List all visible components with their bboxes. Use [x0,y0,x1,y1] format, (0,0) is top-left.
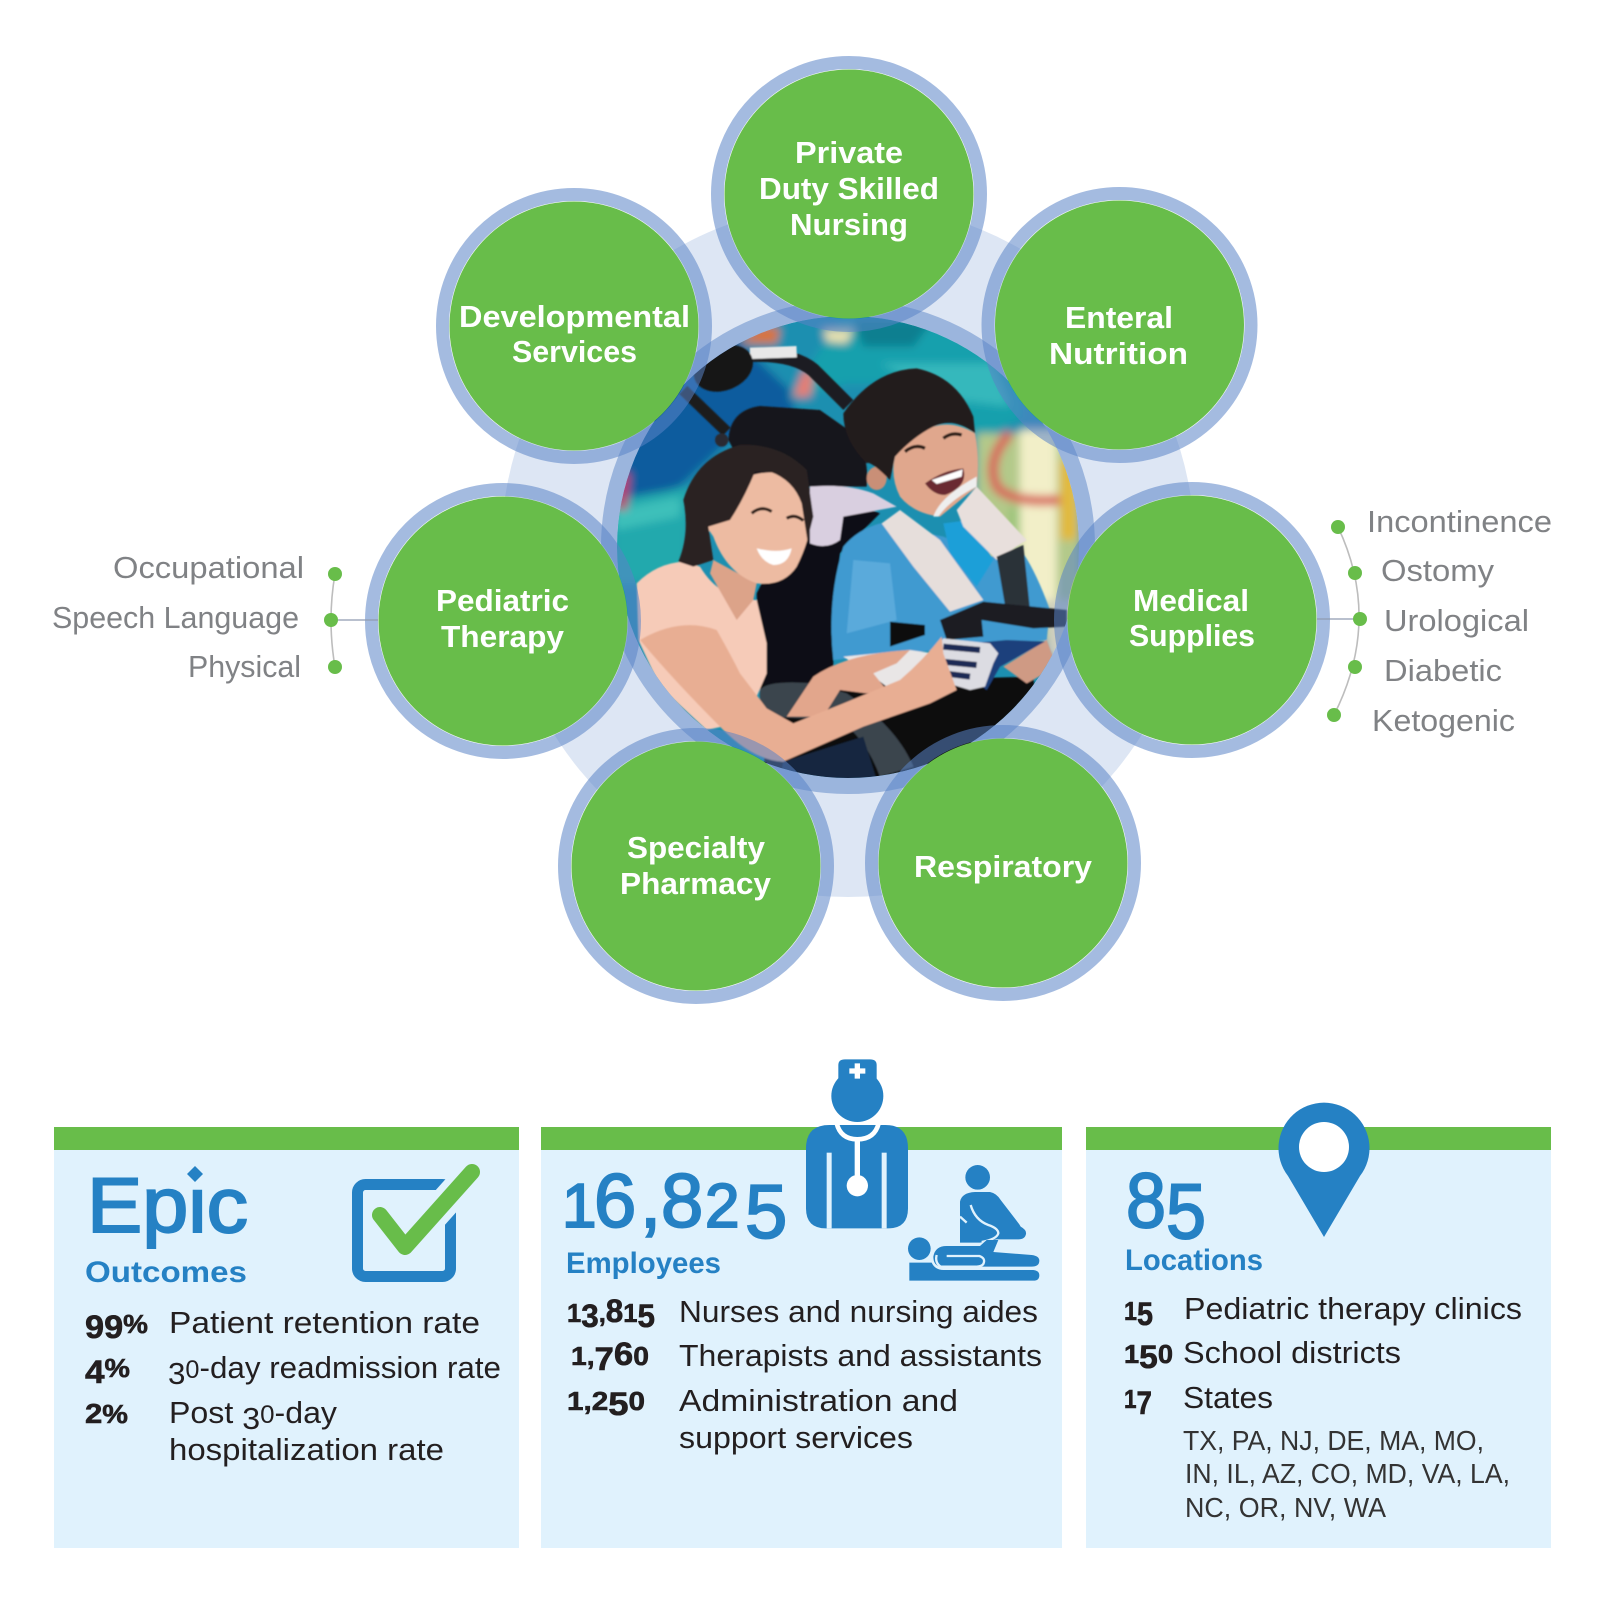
service: Enteral Nutrition: Nutrition [1049,336,1188,371]
stats: outcomes: 4 [85,1354,105,1390]
service: Private Duty Skilled Nursing: Nursing [790,207,908,242]
heading: 16,825: 2 [705,1172,739,1241]
list: pediatric therapy types [52,550,378,684]
stats: locations: Pediatric therapy clinics [1184,1291,1522,1326]
stats: employees: 1 [567,1298,581,1328]
heading: 85: 5 [1166,1167,1206,1255]
icon: check box [358,1172,472,1276]
service: Pediatric Therapy [372,490,634,752]
stats: locations: 5 [1139,1339,1158,1375]
background light disc [501,203,1195,897]
service: Medical Supplies [1060,488,1324,752]
stats: locations: 0 [1158,1339,1173,1369]
service: Respiratory: Respiratory [914,849,1093,884]
service: Medical Supplies: Supplies [1129,618,1255,653]
heading: 16,825: 1 [562,1172,596,1241]
panel: Employees [541,1059,1062,1548]
photo ring [609,308,1087,786]
stats: locations: 7 [1137,1385,1152,1421]
service: Private Duty Skilled Nursing: Duty Skilled [759,171,939,206]
service: Pediatric Therapy: Pediatric [436,583,569,618]
photo: girl beside smiling boy in wheelchair [617,316,1079,778]
stats: outcomes: -day [275,1395,335,1430]
list: state abbreviations [1183,1425,1510,1523]
service: Enteral Nutrition: Enteral [1065,300,1173,335]
service: Private Duty Skilled Nursing: Private [795,135,903,170]
stats: employees: Administration and [679,1383,958,1418]
stats: employees: 7 [595,1341,614,1377]
stats: employees: 0 [629,1386,645,1416]
service: Specialty Pharmacy: Pharmacy [620,866,772,901]
stats: locations: 1 [1124,1384,1137,1414]
list: state abbreviations: IN, IL, AZ, CO, MD, VA, LA, [1185,1458,1510,1489]
stats: employees: Nurses and nursing aides [679,1294,1038,1329]
heading: Epic: Epic [87,1161,248,1249]
list: medical supply types: Ketogenic [1372,703,1515,738]
stats: employees: 5 [608,1386,629,1422]
stats: employees: 3 [581,1298,599,1334]
icon: therapist with patient [908,1165,1039,1281]
list: medical supply types [1317,504,1552,738]
heading: 16,825: 8 [661,1159,703,1244]
stats: locations: States [1183,1380,1273,1415]
subheading: Outcomes: Outcomes [85,1256,247,1289]
boy [831,523,1050,660]
stats: employees: support services [679,1420,913,1455]
list: medical supply types: Incontinence [1367,504,1552,539]
stats: locations [1124,1291,1522,1421]
stats: employees: 1,2 [567,1386,608,1416]
heading: 85: 8 [1126,1156,1166,1244]
subheading: Employees: Employees [566,1247,721,1280]
stats: outcomes: 2% [85,1398,128,1429]
stats: locations: 1 [1124,1296,1137,1326]
service: Medical Supplies: Medical [1133,583,1249,618]
service: Respiratory [872,732,1134,994]
stats: locations: 1 [1124,1339,1139,1369]
stats: locations: School districts [1183,1335,1401,1370]
stats: employees [567,1293,1042,1455]
stats: outcomes: Post [169,1395,231,1430]
stats: outcomes: Patient retention rate [169,1305,480,1340]
heading: 16,825: 6 [594,1159,636,1244]
stats: outcomes: hospitalization rate [169,1432,444,1467]
icon: map pin [1278,1103,1370,1237]
stats: outcomes: -day readmission rate [200,1350,498,1385]
list: pediatric therapy types: Speech Language [52,600,299,635]
stats: outcomes: 3 [168,1356,185,1391]
stats: employees: , [599,1298,606,1328]
service: Enteral Nutrition [988,194,1251,456]
service wheel [372,62,1324,998]
stats: outcomes: 3 [242,1401,260,1436]
girl [637,562,767,730]
list: pediatric therapy types: Physical [188,649,301,684]
stats: employees: 5 [638,1298,655,1334]
stats: outcomes: 9 [104,1309,123,1345]
service: Developmental Services: Developmental [459,299,690,334]
heading: 16,825: 5 [745,1170,787,1255]
stats: outcomes: 0 [185,1356,200,1384]
stats: outcomes: % [123,1309,148,1339]
stats: employees: 6 [614,1336,633,1372]
heading: 16,825: , [640,1159,661,1244]
dark lower area [760,677,1047,800]
panel: Epic Outcomes [54,1127,519,1548]
service: Specialty Pharmacy: Specialty [627,830,766,865]
stats: outcomes: 0 [260,1401,275,1429]
stats: employees: 1, [571,1341,595,1371]
panel: Locations [1086,1103,1551,1548]
icon: nurse with stethoscope [806,1059,908,1228]
list: state abbreviations: NC, OR, NV, WA [1185,1492,1386,1523]
stats: outcomes: 9 [85,1309,104,1345]
service: Pediatric Therapy: Therapy [441,619,565,654]
stats: locations: 5 [1137,1296,1153,1332]
list: pediatric therapy types: Occupational [113,550,304,585]
list: medical supply types: Diabetic [1384,653,1502,688]
list: state abbreviations: TX, PA, NJ, DE, MA, MO, [1183,1425,1484,1456]
stats: employees: Therapists and assistants [679,1338,1042,1373]
service: Developmental Services: Services [512,334,637,369]
stats: outcomes [85,1305,501,1467]
service: Private Duty Skilled Nursing [718,62,980,326]
list: medical supply types: Ostomy [1381,553,1495,588]
stats: outcomes: % [105,1353,130,1383]
subheading: Locations: Locations [1125,1244,1263,1277]
wheelchair [683,390,727,432]
service: Specialty Pharmacy [564,734,828,998]
service: Developmental Services [442,194,706,458]
stats: employees: 81 [606,1293,638,1329]
stats: employees: 0 [633,1341,649,1371]
list: medical supply types: Urological [1384,603,1529,638]
